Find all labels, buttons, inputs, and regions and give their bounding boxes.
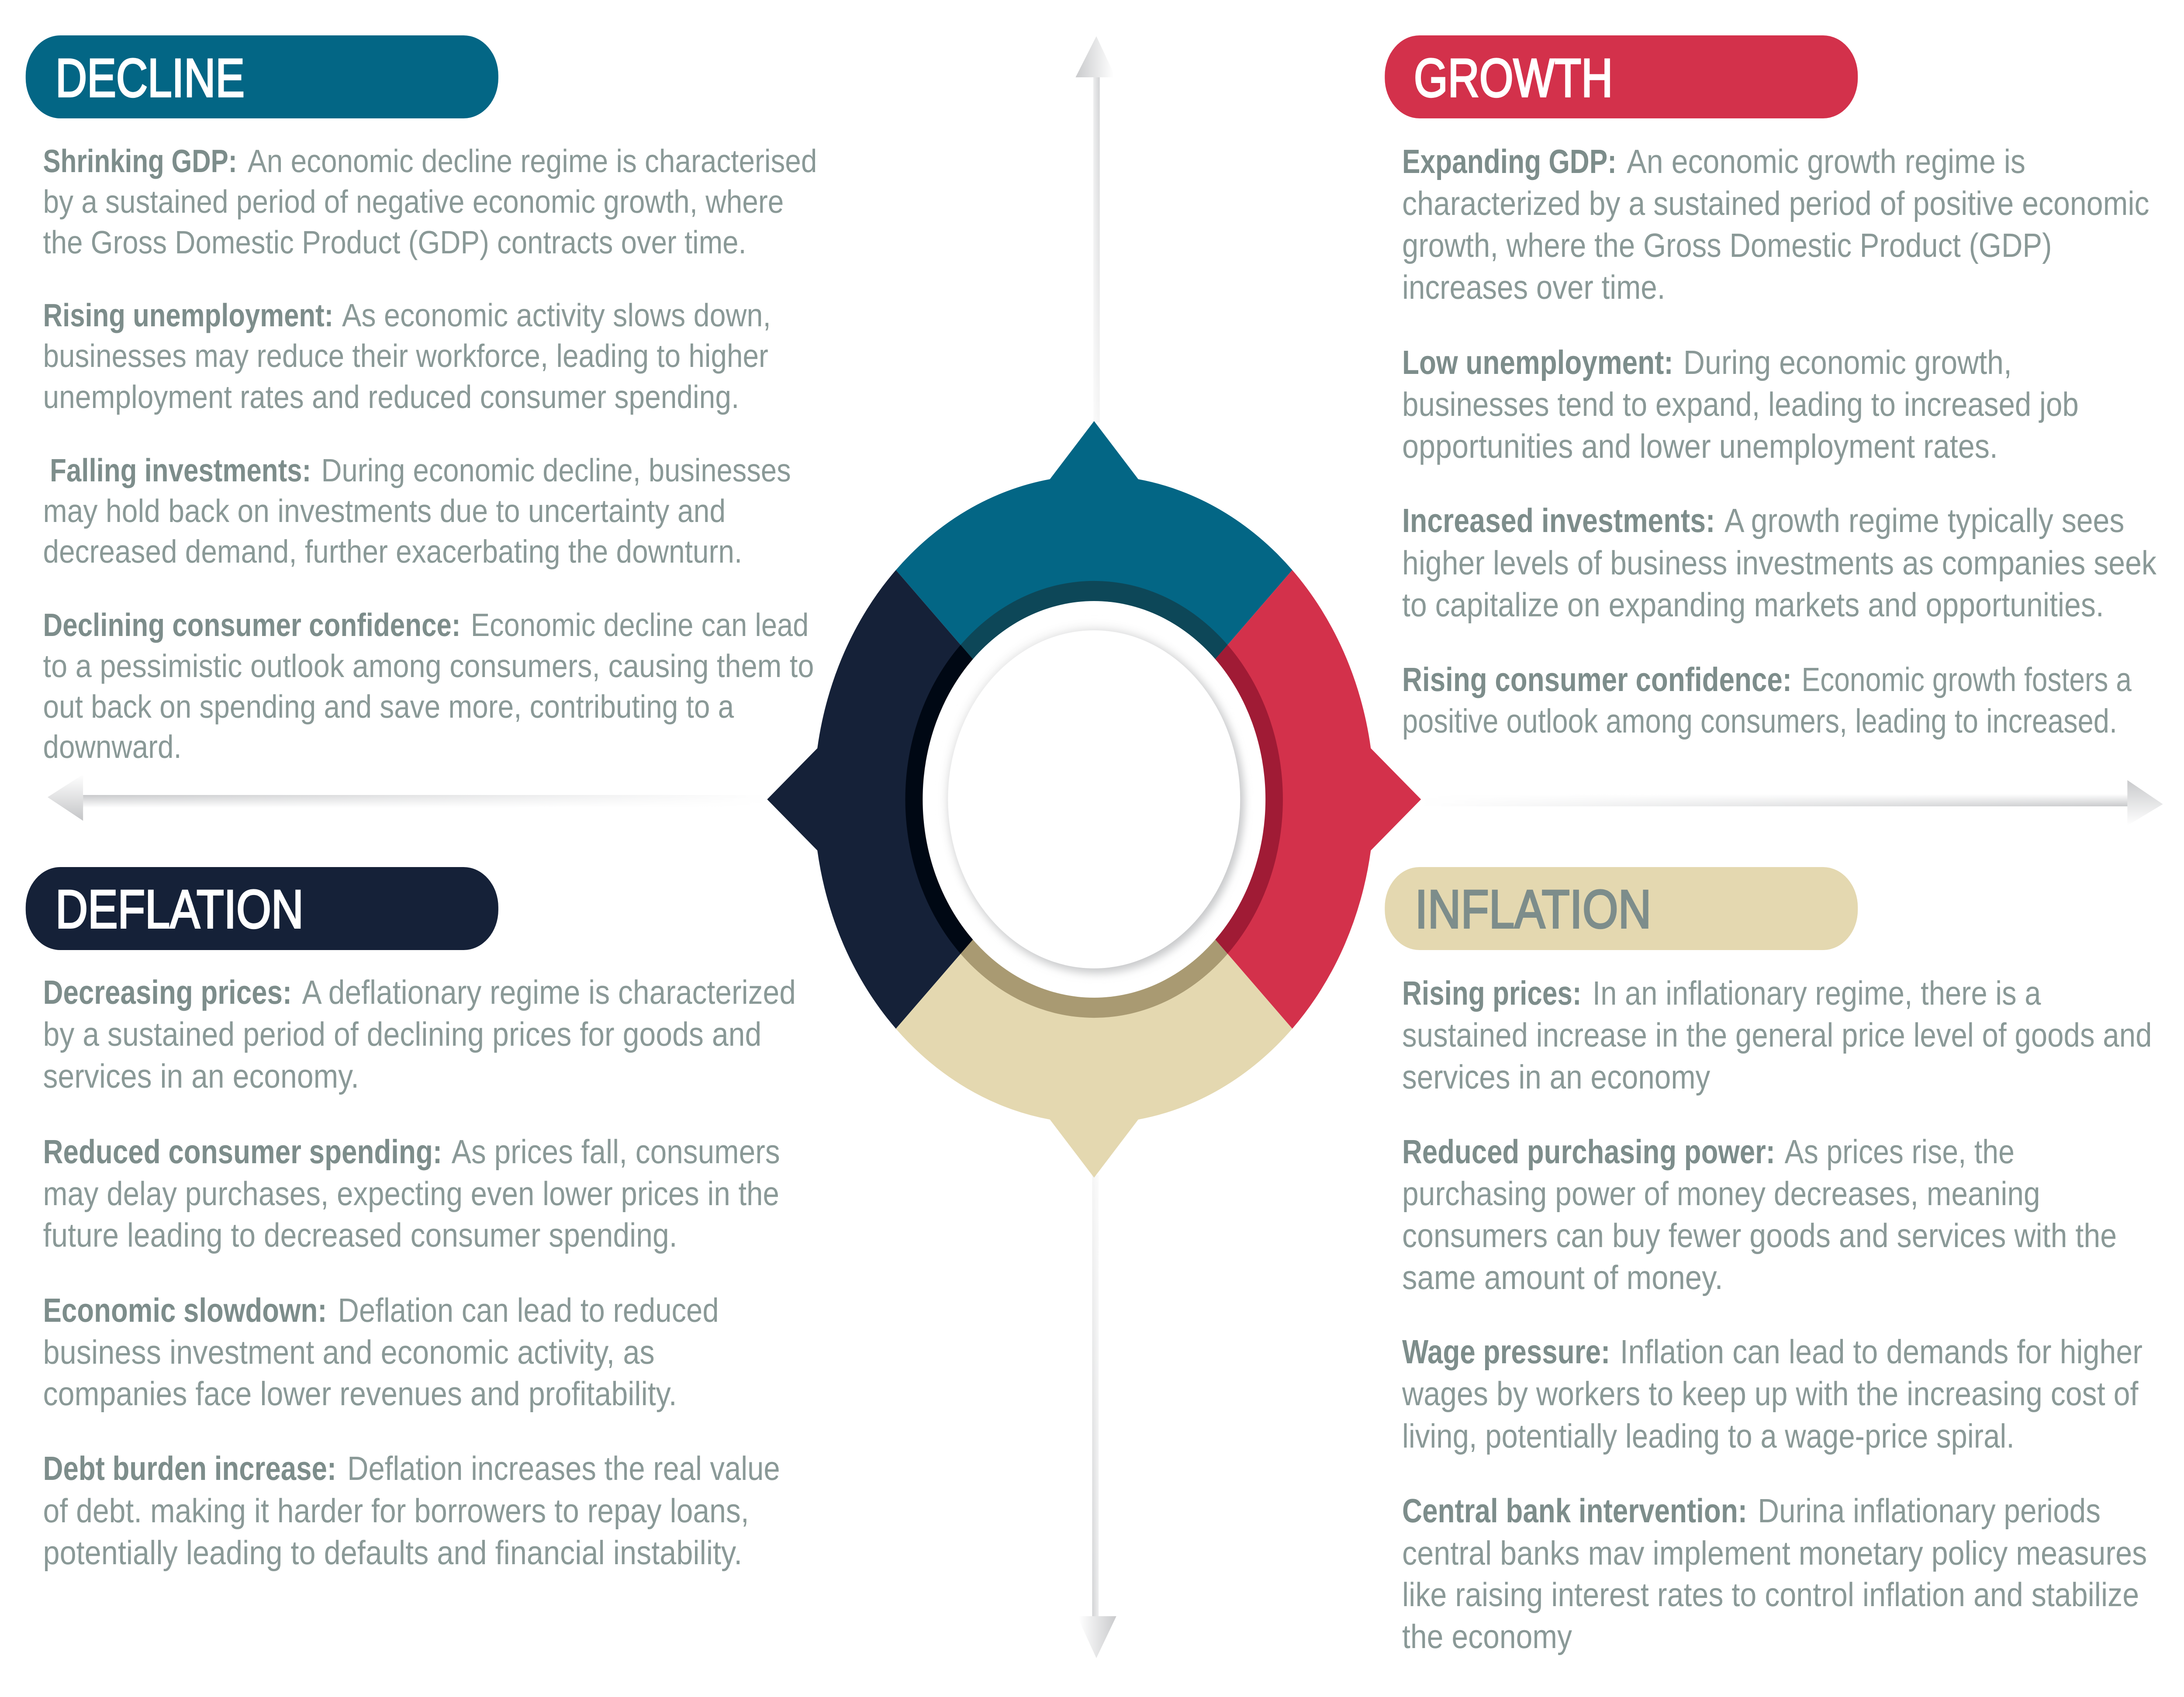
panel: growth [1385, 35, 2156, 740]
text: rising consumer confidence: positive outlook among consumers, leading to increased. [1402, 702, 2117, 740]
text: reduced consumer spending: As prices fall, consumers [452, 1133, 780, 1171]
text: shrinking GDP: An economic decline regime is characterised [248, 143, 817, 179]
arrow: right [1420, 780, 2163, 826]
text: shrinking GDP [43, 143, 817, 260]
text: declining consumer confidence: Economic decline can lead [471, 607, 809, 643]
text: shrinking GDP: Shrinking GDP: [43, 143, 237, 179]
text: debt burden increase: of debt. making it harder for borrowers to repay loans, [43, 1492, 749, 1530]
text: decreasing prices: Decreasing prices: [43, 974, 292, 1011]
text: falling investments: may hold back on investments due to uncertainty and [43, 493, 726, 529]
heading pill: INFLATION: INFLATION [1415, 879, 1651, 940]
heading pill: DEFLATION: DEFLATION [55, 879, 304, 940]
segment: growth (red, right) [1094, 570, 1421, 1029]
text: rising unemployment: businesses may reduce their workforce, leading to higher [43, 338, 768, 374]
centre disc with soft shadow [944, 626, 1244, 972]
panel: deflation [26, 867, 796, 1572]
text: rising prices: services in an economy [1402, 1058, 1711, 1096]
panel: decline [26, 35, 817, 765]
text: increased investments: Increased investments: [1402, 502, 1715, 539]
text: low unemployment: Low unemployment: [1402, 344, 1673, 381]
text: decreasing prices: services in an economy. [43, 1058, 359, 1095]
text: economic slowdown: Deflation can lead to reduced [338, 1292, 719, 1329]
text: reduced purchasing power: As prices rise, the [1785, 1133, 2015, 1171]
text: reduced purchasing power: Reduced purchasing power: [1402, 1133, 1775, 1171]
heading pill: GROWTH: GROWTH [1414, 48, 1613, 108]
text: rising consumer confidence: Economic growth fosters a [1801, 661, 2132, 698]
text: falling investments: During economic decline, businesses [321, 452, 791, 488]
text: shrinking GDP: by a sustained period of negative economic growth, where [43, 183, 784, 220]
text: debt burden increase: Debt burden increase: [43, 1450, 336, 1487]
text: reduced purchasing power: consumers can buy fewer goods and services with the [1402, 1217, 2117, 1255]
text: economic slowdown: companies face lower revenues and profitability. [43, 1375, 677, 1413]
text: rising consumer confidence: Rising consumer confidence: [1402, 661, 1792, 698]
text: central bank intervention: the economy [1402, 1618, 1572, 1656]
text: low unemployment: opportunities and lower unemployment rates. [1402, 428, 1998, 465]
text: reduced purchasing power: purchasing power of money decreases, meaning [1402, 1175, 2040, 1213]
text: declining consumer confidence: to a pessimistic outlook among consumers, causing them to [43, 648, 814, 684]
text: rising unemployment: unemployment rates and reduced consumer spending. [43, 379, 739, 415]
central compass diagram [767, 421, 1421, 1178]
text: expanding GDP: characterized by a sustained period of positive economic [1402, 185, 2149, 222]
text: central bank intervention [1402, 1492, 2147, 1656]
text: wage pressure [1402, 1333, 2143, 1455]
arrow: up [1075, 36, 1116, 422]
text: increased investments [1402, 502, 2156, 624]
segment: deflation (navy, left) [767, 570, 1094, 1029]
text: rising unemployment [43, 297, 771, 415]
text: falling investments [43, 452, 791, 570]
inner ring: teal shade [961, 581, 1227, 799]
text: declining consumer confidence: Declining consumer confidence: [43, 607, 460, 643]
heading pill: INFLATION [1385, 867, 1858, 950]
text: wage pressure: wages by workers to keep up with the increasing cost of [1402, 1375, 2139, 1413]
text: shrinking GDP: the Gross Domestic Product (GDP) contracts over time. [43, 224, 746, 260]
arrow: left [48, 774, 768, 821]
text: declining consumer confidence [43, 607, 814, 765]
text: decreasing prices: by a sustained period of declining prices for goods and [43, 1016, 761, 1053]
text: debt burden increase: Deflation increases the real value [347, 1450, 780, 1487]
text: reduced purchasing power [1402, 1133, 2117, 1296]
text: rising unemployment: Rising unemployment: [43, 297, 333, 333]
text: rising unemployment: As economic activity slows down, [342, 297, 771, 333]
text: expanding GDP: An economic growth regime is [1627, 143, 2025, 180]
heading pill: DEFLATION [26, 867, 498, 950]
heading pill: DECLINE: DECLINE [55, 48, 245, 108]
inner ring: red shade [1094, 645, 1283, 954]
text: central bank intervention: Durina inflationary periods [1758, 1492, 2101, 1530]
inner ring: tan shade [961, 799, 1227, 1018]
text: low unemployment [1402, 344, 2079, 465]
text: expanding GDP [1402, 143, 2149, 306]
text: reduced purchasing power: same amount of money. [1402, 1259, 1723, 1296]
text: economic slowdown: Economic slowdown: [43, 1292, 327, 1329]
segment: inflation (tan, bottom) [896, 799, 1292, 1178]
text: falling investments: decreased demand, further exacerbating the downturn. [43, 533, 742, 570]
text: reduced consumer spending: future leading to decreased consumer spending. [43, 1217, 677, 1254]
text: rising prices [1402, 975, 2152, 1096]
text: expanding GDP: growth, where the Gross Domestic Product (GDP) [1402, 227, 2052, 264]
text: reduced consumer spending: may delay purchases, expecting even lower prices in the [43, 1175, 779, 1213]
text: economic slowdown [43, 1292, 719, 1413]
text: expanding GDP: Expanding GDP: [1402, 143, 1617, 180]
text: economic slowdown: business investment and economic activity, as [43, 1334, 655, 1371]
white ring [923, 601, 1265, 998]
text: increased investments: to capitalize on expanding markets and opportunities. [1402, 586, 2104, 624]
text: wage pressure: living, potentially leading to a wage-price spiral. [1402, 1417, 2015, 1455]
text: reduced consumer spending [43, 1133, 780, 1254]
text: rising prices: sustained increase in the general price level of goods and [1402, 1016, 2152, 1054]
text: declining consumer confidence: out back on spending and save more, contributing to a [43, 688, 734, 725]
text: central bank intervention: Central bank intervention: [1402, 1492, 1747, 1530]
text: decreasing prices: A deflationary regime is characterized [302, 974, 796, 1011]
arrow: down [1077, 1175, 1116, 1658]
text: low unemployment: businesses tend to expand, leading to increased job [1402, 386, 2079, 423]
text: falling investments: Falling investments: [50, 452, 311, 488]
segment: decline (teal, top) [896, 421, 1292, 799]
text: wage pressure: Wage pressure: [1402, 1333, 1610, 1371]
text: rising prices: Rising prices: [1402, 975, 1582, 1012]
text: debt burden increase [43, 1450, 780, 1572]
heading pill: DECLINE [26, 35, 498, 118]
panel: inflation [1385, 867, 2152, 1656]
text: low unemployment: During economic growth, [1683, 344, 2012, 381]
text: rising prices: In an inflationary regime, there is a [1593, 975, 2041, 1012]
text: reduced consumer spending: Reduced consumer spending: [43, 1133, 442, 1171]
text: declining consumer confidence: downward. [43, 729, 182, 765]
inner ring: navy shade [905, 645, 1094, 954]
text: decreasing prices [43, 974, 796, 1095]
text: rising consumer confidence [1402, 661, 2132, 740]
text: wage pressure: Inflation can lead to demands for higher [1620, 1333, 2143, 1371]
text: debt burden increase: potentially leading to defaults and financial instability. [43, 1534, 742, 1572]
heading pill: GROWTH [1385, 35, 1858, 118]
text: central bank intervention: like raising interest rates to control inflation and stabilize [1402, 1576, 2139, 1614]
text: increased investments: higher levels of business investments as companies seek [1402, 544, 2156, 582]
text: increased investments: A growth regime typically sees [1724, 502, 2124, 539]
text: expanding GDP: increases over time. [1402, 269, 1665, 306]
text: central bank intervention: central banks mav implement monetary policy measures [1402, 1535, 2147, 1572]
